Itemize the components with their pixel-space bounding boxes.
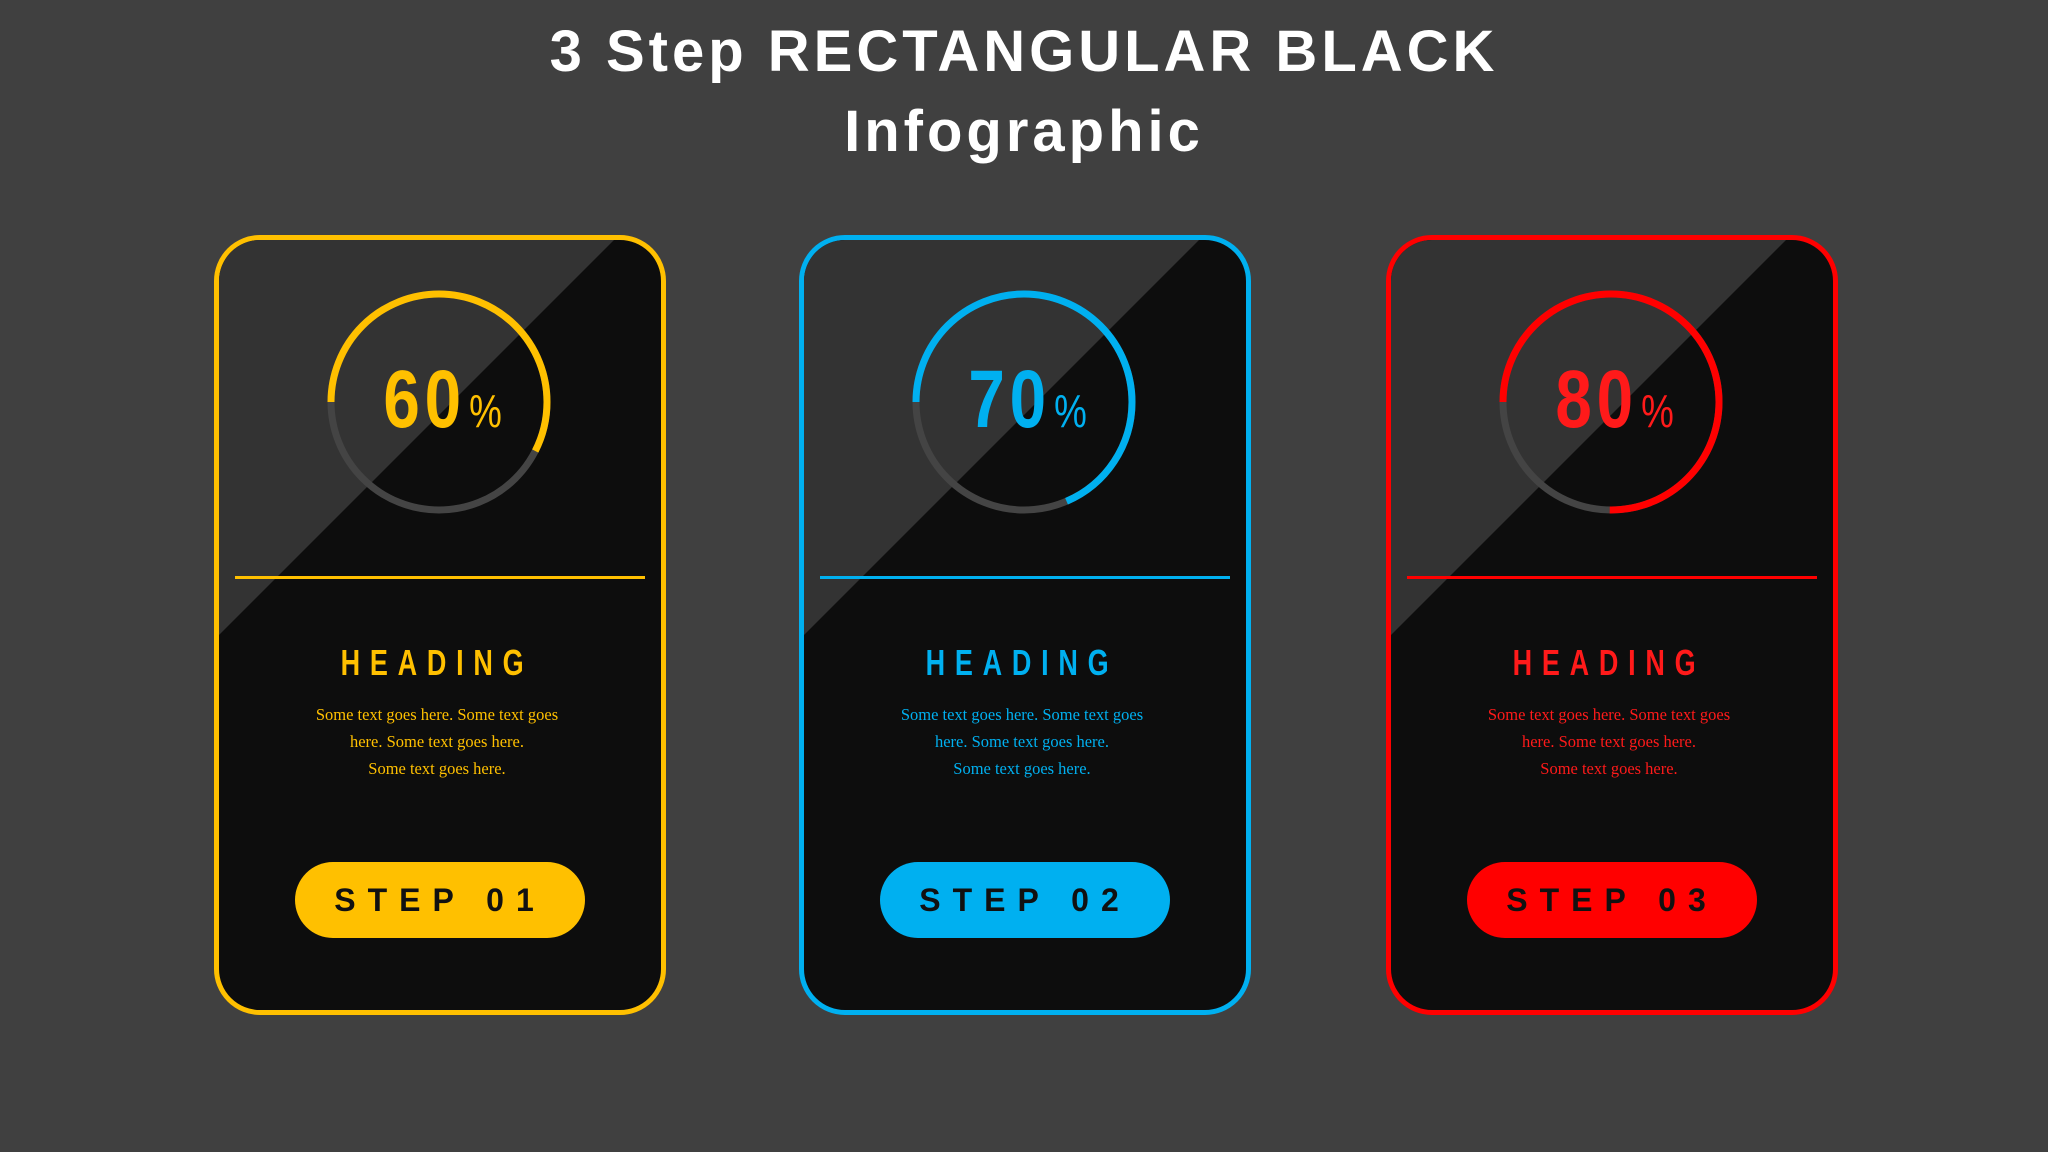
panel: step 3 xyxy=(1386,235,1838,1015)
text block: Some text goes here. xyxy=(1540,759,1678,778)
percentage: 60% xyxy=(383,354,507,445)
text block xyxy=(316,705,558,778)
text block: here. Some text goes here. xyxy=(350,732,524,751)
text block: Some text goes here. Some text goes xyxy=(316,705,558,724)
text block: Some text goes here. xyxy=(368,759,506,778)
percentage: 70% xyxy=(968,354,1092,445)
heading: HEADING xyxy=(341,642,533,683)
chart: 60% ring xyxy=(328,290,550,514)
text block: here. Some text goes here. xyxy=(1522,732,1696,751)
text block xyxy=(1488,705,1730,778)
button: step 02: STEP 02 xyxy=(919,882,1131,918)
text block: Some text goes here. Some text goes xyxy=(1488,705,1730,724)
button: step 03: STEP 03 xyxy=(1506,882,1718,918)
text block: Some text goes here. xyxy=(953,759,1091,778)
button: step 01 xyxy=(295,862,585,938)
button: step 03 xyxy=(1467,862,1757,938)
panel: step 2 xyxy=(799,235,1251,1015)
percentage: 80% xyxy=(1555,354,1679,445)
text block: Some text goes here. Some text goes xyxy=(901,705,1143,724)
panel: step 1 xyxy=(214,235,666,1015)
button: step 01: STEP 01 xyxy=(334,882,546,918)
heading: HEADING xyxy=(1513,642,1705,683)
title: 3 Step RECTANGULAR BLACK xyxy=(550,19,1498,84)
text block xyxy=(901,705,1143,778)
button: step 02 xyxy=(880,862,1170,938)
chart: 80% ring xyxy=(1500,290,1722,514)
heading: HEADING xyxy=(926,642,1118,683)
title xyxy=(550,19,1498,164)
title: Infographic xyxy=(844,99,1204,164)
text block: here. Some text goes here. xyxy=(935,732,1109,751)
chart: 70% ring xyxy=(912,290,1136,514)
